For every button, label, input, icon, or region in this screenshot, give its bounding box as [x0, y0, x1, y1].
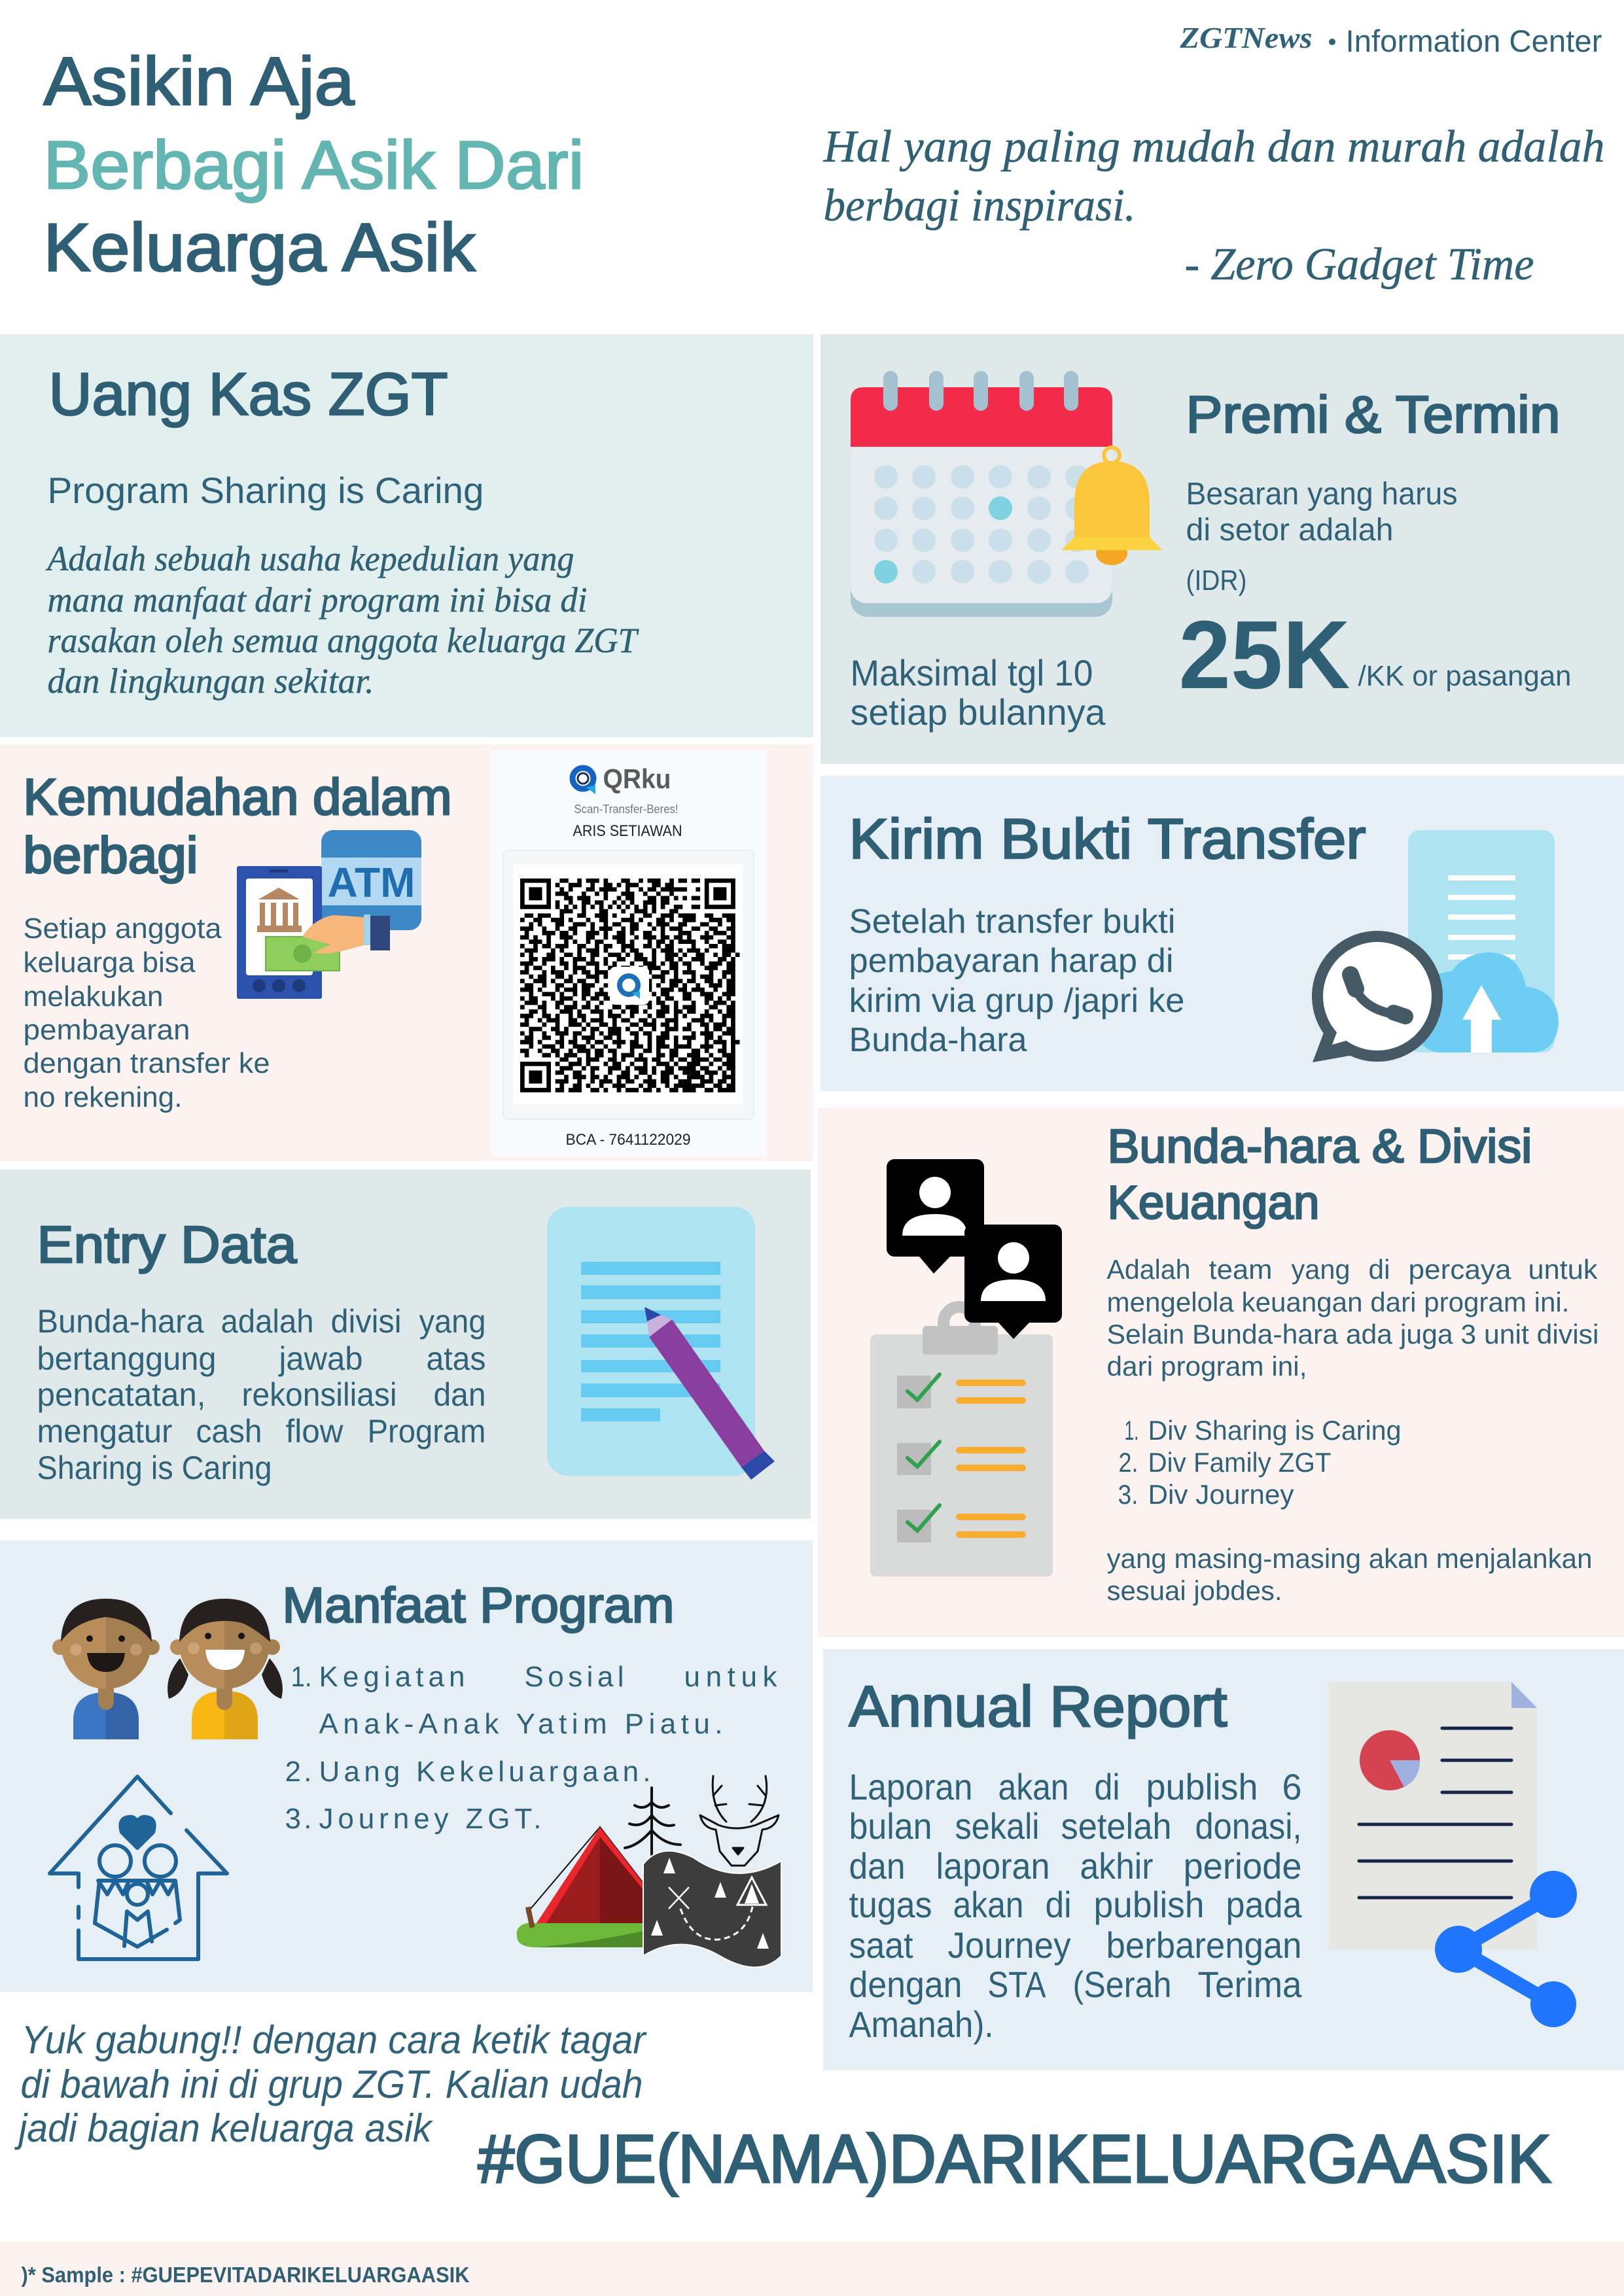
caption: payment deadline: Maksimal tgl 10 [851, 652, 1093, 693]
icon: deer [700, 1776, 779, 1866]
text block: closing note [1107, 1543, 1593, 1606]
heading: Kemudahan dalam berbagi: berbagi [24, 826, 198, 884]
list: program benefits [285, 1661, 777, 1835]
list: divisions: 1. [1124, 1415, 1139, 1446]
list: program benefits: Anak-Anak Yatim Piatu. [319, 1708, 722, 1740]
list: divisions: Div Journey [1148, 1479, 1294, 1510]
text block: Entry Data description: yang [419, 1303, 485, 1340]
QRku logo [573, 763, 671, 794]
panel: Annual Report [823, 1649, 1624, 2070]
heading: Kirim Bukti Transfer: Kirim Bukti Transfer [849, 808, 1366, 871]
QR slogan and account name [573, 803, 682, 840]
text block: team description: untuk [1528, 1254, 1598, 1285]
text block: report schedule: (Serah [1073, 1964, 1171, 2005]
panel: Kirim Bukti Transfer [821, 776, 1624, 1091]
panel: Entry Data [0, 1170, 811, 1519]
text block: amount intro: di setor adalah [1186, 513, 1394, 548]
text block: Entry Data description: bertanggung [37, 1340, 216, 1377]
text block: team description: team [1209, 1254, 1272, 1285]
text block: report schedule: Amanah). [849, 2004, 993, 2045]
text block: team description: dari program ini, [1107, 1351, 1307, 1382]
text block: amount intro: (IDR) [1186, 565, 1247, 597]
QRku logo: QRku [603, 763, 671, 794]
panel: Uang Kas ZGT [0, 334, 813, 737]
text block: report schedule: STA [988, 1964, 1046, 2005]
text block: Entry Data description: flow [285, 1413, 344, 1450]
text block: report schedule: laporan [936, 1845, 1050, 1887]
text block: report schedule: bulan [849, 1805, 932, 1847]
text block: transfer explanation: no rekening. [24, 1081, 182, 1113]
footer band with sample hashtag [0, 2242, 1624, 2296]
text block: report schedule: pada [1226, 1884, 1302, 1925]
call to action text: di bawah ini di grup ZGT. Kalian udah [21, 2062, 643, 2106]
icon: share [1435, 1871, 1577, 2027]
text block: report schedule: periode [1183, 1845, 1302, 1887]
icon: report document [1329, 1682, 1537, 1949]
text block: transfer explanation: pembayaran [24, 1014, 190, 1046]
panel: Premi & Termin [821, 334, 1624, 764]
text block: send proof of transfer: kirim via grup /japri ke [849, 982, 1184, 1020]
panel: Manfaat Program [0, 1540, 813, 1992]
list: program benefits: Journey ZGT. [319, 1803, 542, 1835]
header: quote: Hal yang paling mudah dan murah adalah [823, 122, 1604, 172]
call to action text: Yuk gabung!! dengan cara ketik tagar [21, 2018, 646, 2062]
hashtag: #GUE(NAMA)DARIKELUARGAASIK [478, 2121, 1551, 2197]
icon: family house [50, 1777, 227, 1959]
text block: report schedule: akan [998, 1766, 1069, 1807]
text block: closing note: sesuai jobdes. [1107, 1575, 1282, 1606]
text block: description: rasakan oleh semua anggota keluarga ZGT [47, 621, 639, 660]
icon: document with pencil [547, 1207, 775, 1480]
text block: report schedule: di [1094, 1766, 1120, 1807]
number: 25K: 25K [1179, 601, 1350, 709]
text block: description: dan lingkungan sekitar. [47, 661, 374, 701]
text block: Entry Data description: rekonsiliasi [242, 1376, 397, 1413]
subheading: Program Sharing is Caring: Program Sharing is Caring [47, 470, 484, 511]
text block: send proof of transfer: Setelah transfer bukti [849, 903, 1175, 941]
text block: report schedule: donasi, [1195, 1805, 1302, 1847]
icon: treasure map [643, 1851, 781, 1968]
text block: team description: percaya [1408, 1254, 1511, 1285]
heading: Bunda-hara & Divisi Keuangan [1107, 1121, 1532, 1229]
icon: boy [52, 1599, 160, 1739]
heading: Entry Data: Entry Data [37, 1215, 297, 1274]
icon: camping tent [517, 1827, 644, 1947]
text block: team description: yang [1292, 1254, 1350, 1285]
text block: transfer explanation: dengan transfer ke [24, 1047, 270, 1079]
text block: Entry Data description: atas [427, 1340, 485, 1377]
text block: team description: mengelola keuangan dari program ini. [1107, 1287, 1569, 1317]
icon: girl [168, 1599, 283, 1739]
text block: report schedule: akhir [1080, 1845, 1153, 1887]
call to action text [14, 2018, 646, 2150]
panel: Bunda-hara & Divisi Keuangan [818, 1107, 1624, 1637]
heading: Bunda-hara & Divisi Keuangan: Bunda-hara & Divisi [1107, 1121, 1532, 1173]
QR slogan and account name: ARIS SETIAWAN [573, 822, 682, 840]
header: main title [43, 44, 584, 286]
QR center logo [610, 967, 649, 1005]
header: quote: berbagi inspirasi. [823, 181, 1136, 231]
text block: report schedule: Laporan [849, 1766, 972, 1807]
list: divisions: 2. [1119, 1447, 1139, 1478]
text block: amount intro: Besaran yang harus [1186, 477, 1458, 512]
icon: ATM and mobile banking: ATM [327, 859, 415, 906]
text block: Entry Data description: divisi [331, 1303, 402, 1340]
list: program benefits: 2. [285, 1756, 311, 1788]
panel: Kemudahan dalam berbagi [0, 744, 813, 1161]
text block: Entry Data description: cash [196, 1413, 262, 1450]
text block: description: mana manfaat dari program ini bisa di [47, 580, 588, 619]
list: divisions: Div Family ZGT [1148, 1447, 1331, 1478]
heading: Annual Report: Annual Report [849, 1674, 1227, 1739]
text block: report schedule [849, 1766, 1302, 2045]
text block: amount intro [1186, 477, 1458, 597]
list: program benefits: Sosial [525, 1661, 624, 1693]
text block: report schedule: 6 [1282, 1766, 1302, 1807]
text block: Entry Data description: pencatatan, [37, 1376, 205, 1413]
list: program benefits: Kegiatan [319, 1661, 465, 1693]
QR code [520, 878, 739, 1090]
header: main title: Asikin Aja [43, 44, 355, 120]
text block: send proof of transfer [849, 903, 1184, 1059]
header: quote [823, 122, 1604, 290]
QR slogan and account name: Scan-Transfer-Beres! [574, 803, 678, 816]
footer band with sample hashtag: )* Sample : #GUEPEVITADARIKELUARGAASIK [21, 2263, 470, 2287]
heading: Manfaat Program: Manfaat Program [283, 1578, 674, 1633]
text block: Entry Data description: Program [368, 1413, 485, 1450]
text block: Entry Data description: Sharing is Caring [37, 1450, 272, 1486]
text block: team description: Adalah [1107, 1254, 1191, 1285]
text block: report schedule: publish [1146, 1766, 1258, 1807]
heading: Bunda-hara & Divisi Keuangan: Keuangan [1107, 1177, 1319, 1229]
list: program benefits: untuk [684, 1661, 777, 1693]
text block: report schedule: saat [849, 1924, 913, 1966]
caption: payment deadline [851, 652, 1106, 733]
text block: report schedule: dan [849, 1845, 906, 1887]
header: main title: Keluarga Asik [43, 210, 476, 286]
text block: Entry Data description: mengatur [37, 1413, 173, 1450]
heading: Kemudahan dalam berbagi: Kemudahan dalam [24, 768, 451, 826]
text block: Entry Data description: adalah [221, 1303, 314, 1340]
header: brand line [1179, 21, 1602, 58]
heading: Premi & Termin: Premi & Termin [1186, 385, 1560, 444]
text block: description: Adalah sebuah usaha kepedulian yang [46, 539, 574, 578]
icon: calendar with bell [851, 371, 1162, 617]
icon: pine tree [625, 1788, 680, 1854]
header: brand line: ZGTNews [1179, 21, 1313, 54]
list: divisions: Div Sharing is Caring [1148, 1415, 1402, 1446]
list: program benefits: Uang Kekeluargaan. [319, 1756, 650, 1788]
text block: report schedule: publish [1094, 1884, 1204, 1925]
text block: team description: Selain Bunda-hara ada juga 3 unit divisi [1107, 1319, 1599, 1349]
text block: report schedule: akan [953, 1884, 1023, 1925]
text block: closing note: yang masing-masing akan menjalankan [1107, 1543, 1593, 1574]
text block: transfer explanation: keluarga bisa [24, 947, 196, 979]
text block: Entry Data description: jawab [278, 1340, 362, 1377]
text block: Entry Data description: dan [433, 1376, 485, 1413]
list: program benefits: 3. [285, 1803, 311, 1835]
list: divisions: 3. [1118, 1479, 1139, 1510]
QR payment card [491, 750, 767, 1157]
text block: report schedule: setelah [1061, 1805, 1171, 1847]
text block: Entry Data description [37, 1303, 485, 1486]
text block: team description [1107, 1254, 1599, 1382]
bank account number: BCA - 7641122029 [565, 1131, 691, 1149]
icon: ATM and mobile banking [237, 830, 421, 999]
heading: Kemudahan dalam berbagi [24, 768, 451, 884]
text block: report schedule: sekali [955, 1805, 1039, 1847]
text block: report schedule: Journey [947, 1924, 1070, 1966]
header: main title: Berbagi Asik Dari [43, 128, 584, 203]
text block: report schedule: dengan [849, 1964, 962, 2005]
header: quote: - Zero Gadget Time [1184, 239, 1534, 290]
text block: team description: di [1369, 1254, 1390, 1285]
heading: Uang Kas ZGT: Uang Kas ZGT [48, 361, 448, 428]
text block: description [46, 539, 639, 701]
text block: report schedule: tugas [849, 1884, 932, 1925]
icon: team and checklist [870, 1159, 1062, 1576]
list: divisions [1118, 1415, 1402, 1510]
text block: transfer explanation [24, 913, 270, 1113]
list: program benefits: 1. [291, 1661, 311, 1693]
text block: report schedule: Terima [1197, 1964, 1302, 2005]
text block: report schedule: berbarengan [1106, 1924, 1302, 1966]
header: brand line: Information Center [1345, 24, 1602, 58]
text block: transfer explanation: melakukan [24, 981, 164, 1013]
call to action text: jadi bagian keluarga asik [14, 2106, 433, 2150]
text block: Entry Data description: Bunda-hara [37, 1303, 204, 1340]
unit: per KK or pair: /KK or pasangan [1358, 660, 1572, 692]
text block: send proof of transfer: pembayaran harap di [849, 942, 1174, 980]
icon: document, cloud upload and WhatsApp [1312, 830, 1559, 1062]
text block: report schedule: di [1046, 1884, 1072, 1925]
text block: send proof of transfer: Bunda-hara [849, 1021, 1027, 1059]
text block: transfer explanation: Setiap anggota [24, 913, 222, 945]
caption: payment deadline: setiap bulannya [851, 691, 1106, 733]
